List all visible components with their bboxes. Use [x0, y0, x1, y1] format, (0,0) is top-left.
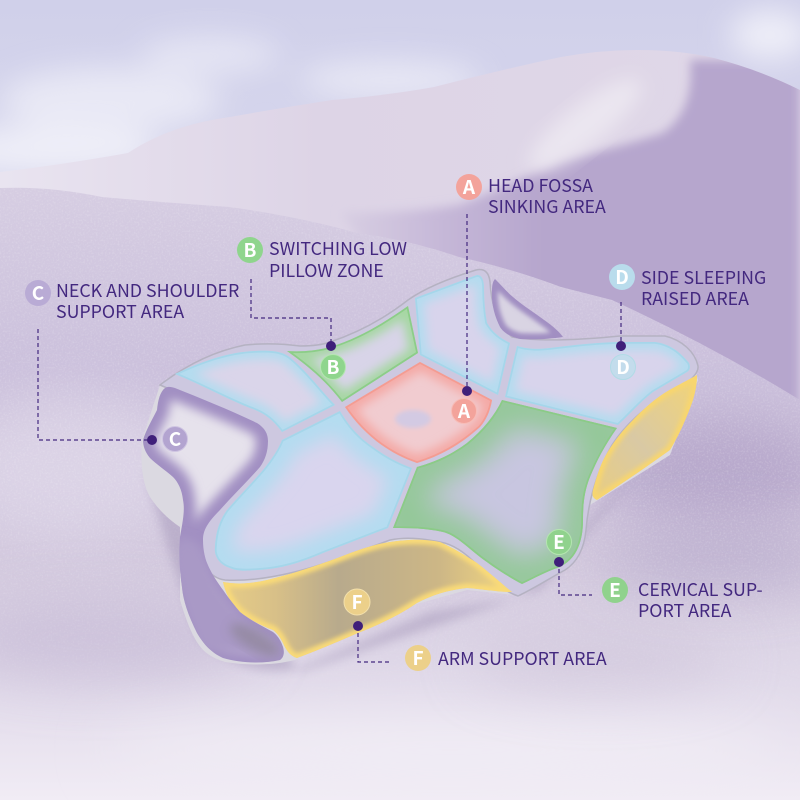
label D: side sleeping raised area: D	[615, 263, 629, 290]
label F: arm support area: F	[412, 644, 424, 671]
label E: cervical support area: PORT AREA	[638, 597, 732, 623]
zone D: blue upper left	[175, 351, 335, 432]
zone C: upper right wedge	[492, 279, 563, 339]
marker B on pillow: B	[327, 353, 340, 380]
zone B: switching low pillow	[287, 306, 418, 402]
marker A on pillow	[452, 386, 476, 424]
label C: neck and shoulder support area: C	[32, 279, 44, 306]
zone C: neck and shoulder support	[143, 387, 284, 663]
marker D on pillow	[610, 341, 636, 380]
marker F on pillow: F	[351, 588, 363, 615]
marker D on pillow: D	[616, 353, 630, 380]
zone F: arm support left	[223, 540, 512, 658]
pillow shadow	[145, 410, 700, 672]
label C: neck and shoulder support area: SUPPORT AREA	[56, 298, 184, 324]
zone F: arm support right	[592, 375, 697, 500]
label D: side sleeping raised area	[609, 263, 766, 311]
leader line B	[251, 279, 331, 346]
label A: head fossa sinking area: A	[462, 173, 476, 200]
label B: switching low pillow zone: PILLOW ZONE	[269, 257, 384, 283]
marker E on pillow	[546, 528, 572, 567]
leader line F	[358, 626, 392, 662]
zone D: side sleeping raised	[505, 342, 690, 425]
label F: arm support area: ARM SUPPORT AREA	[438, 645, 607, 671]
pillow side body	[141, 335, 698, 664]
leader line E	[559, 562, 592, 595]
marker E on pillow: E	[553, 528, 565, 555]
leader line A	[466, 214, 468, 391]
zone D: large blue lower	[215, 411, 412, 571]
label B: switching low pillow zone: B	[244, 236, 257, 263]
label A: head fossa sinking area	[456, 172, 606, 219]
leader line C	[38, 329, 152, 440]
label C: neck and shoulder support area: NECK AND SHOULDER	[56, 277, 239, 303]
zone E: cervical support	[393, 400, 617, 584]
label D: side sleeping raised area: SIDE SLEEPING	[641, 264, 766, 290]
marker C on pillow: C	[169, 425, 181, 452]
label B: switching low pillow zone: SWITCHING LOW	[269, 235, 407, 261]
label A: head fossa sinking area: HEAD FOSSA	[488, 172, 593, 198]
label B: switching low pillow zone	[237, 235, 407, 283]
zone A: head fossa	[345, 362, 492, 463]
label E: cervical support area	[602, 576, 763, 623]
marker F on pillow	[344, 588, 370, 631]
marker A on pillow: A	[457, 397, 471, 424]
leader line D	[620, 302, 622, 346]
label E: cervical support area: E	[609, 576, 621, 603]
zone D: blue top centre	[415, 275, 510, 395]
label D: side sleeping raised area: RAISED AREA	[641, 285, 749, 311]
marker C on pillow	[147, 425, 188, 452]
label C: neck and shoulder support area	[25, 277, 239, 324]
marker B on pillow	[320, 341, 346, 380]
pillow top surface	[160, 270, 698, 596]
label E: cervical support area: CERVICAL SUP-	[638, 576, 763, 602]
label A: head fossa sinking area: SINKING AREA	[488, 193, 606, 219]
panel: pillow	[141, 270, 700, 672]
